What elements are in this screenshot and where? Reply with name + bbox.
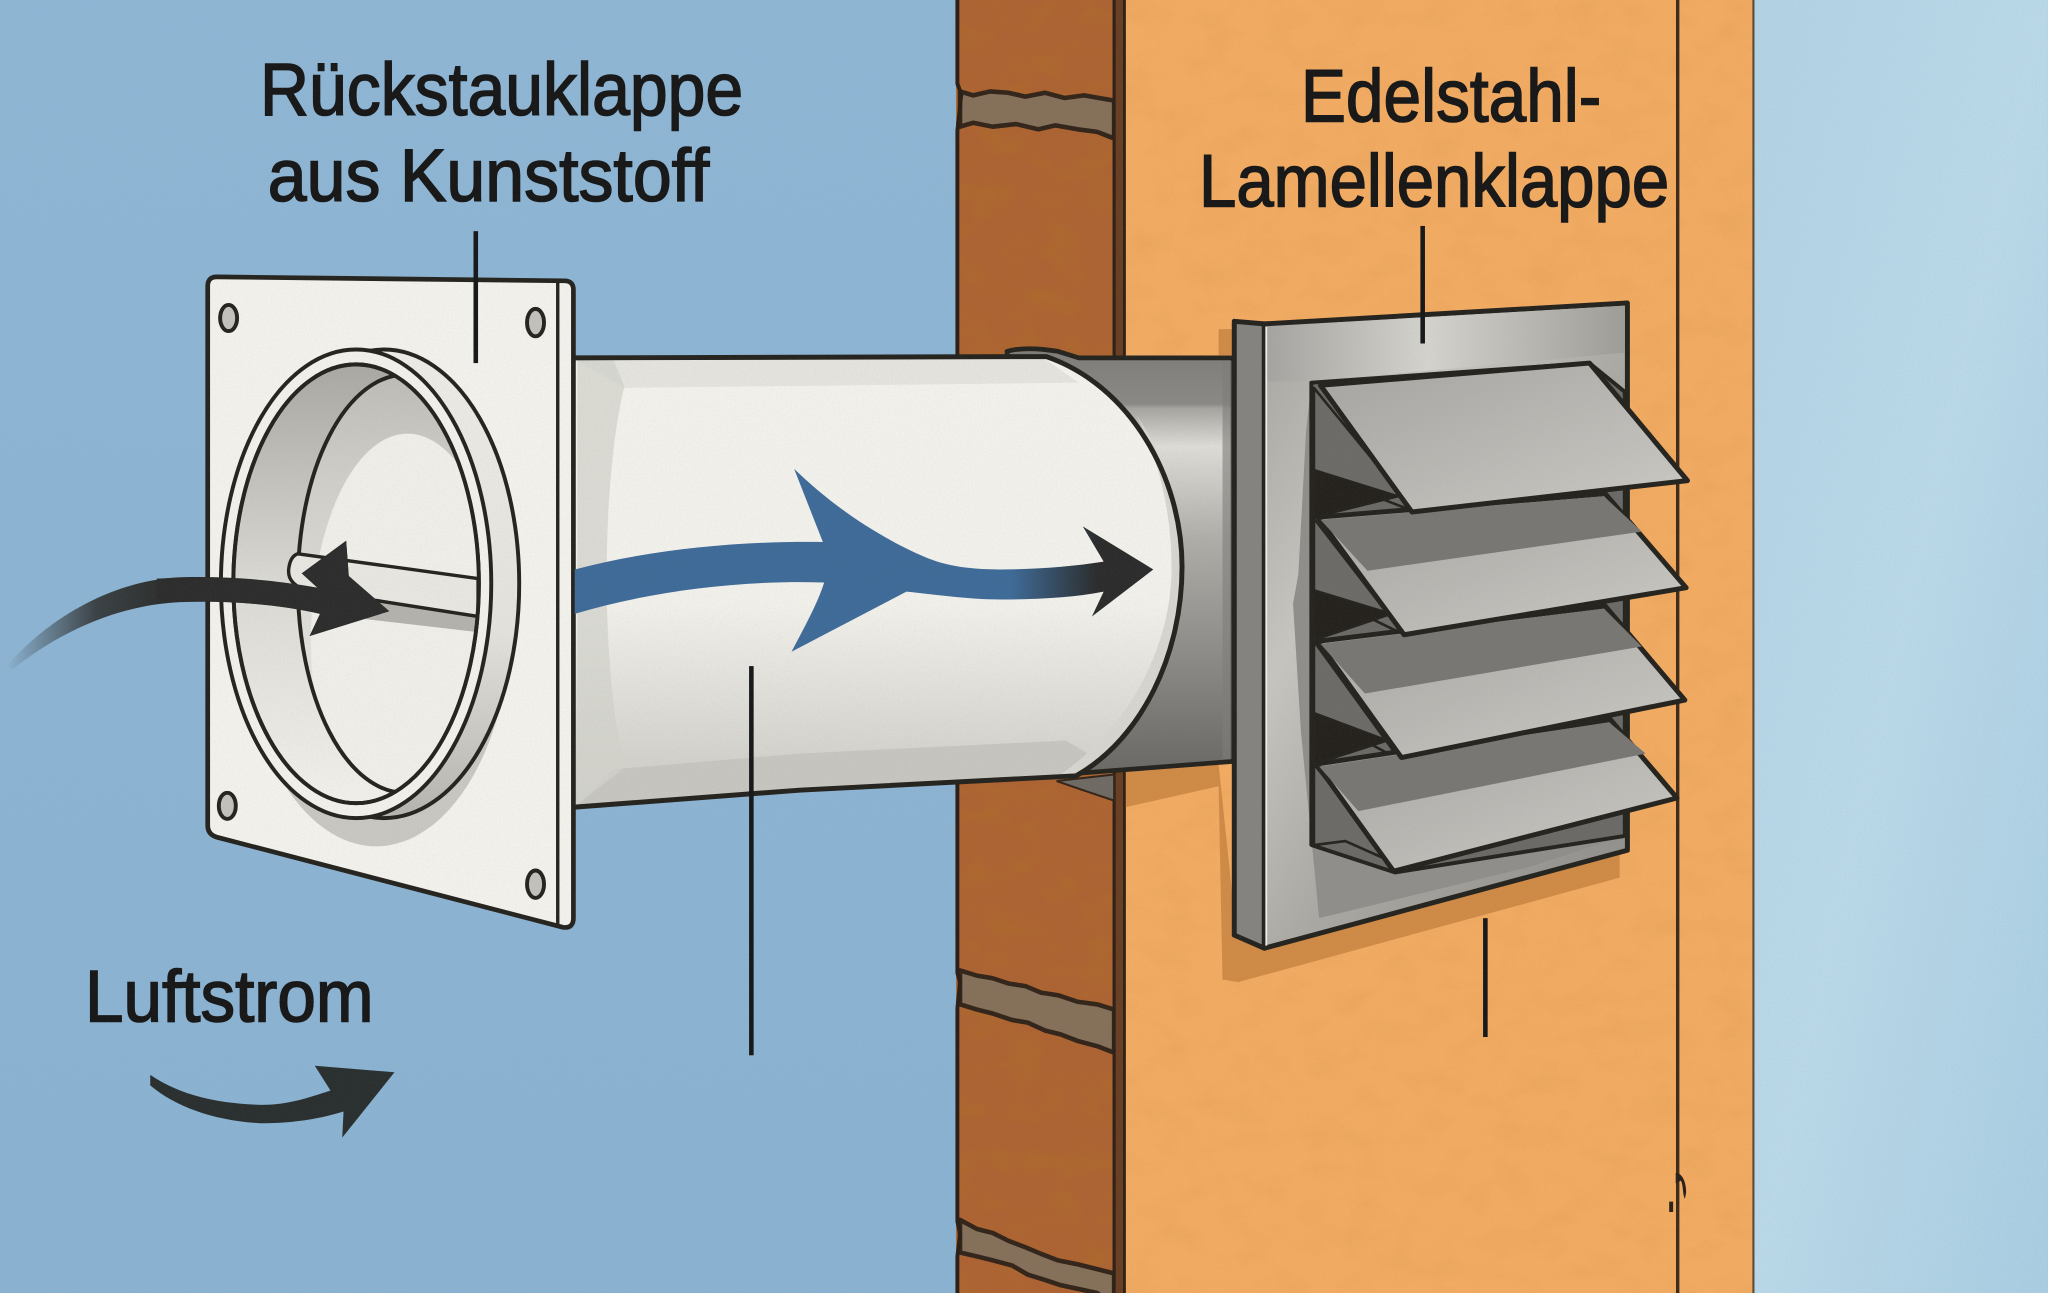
rod shadow: [365, 602, 476, 632]
louvre 4: [1317, 720, 1677, 871]
label: Luftstrom: Luftstrom: [85, 956, 374, 1037]
louvre side brackets: [1314, 388, 1416, 862]
label: Rückstauklappe aus Kunststoff: aus Kunststoff: [268, 134, 710, 217]
plate: [208, 277, 573, 927]
background: outside sky, right: [1753, 0, 2048, 1293]
hood front highlight: [1265, 327, 1267, 946]
leader line: flap: [473, 231, 478, 363]
hood shadow around opening: [1293, 383, 1625, 918]
shadow: cast by metal hood on wall: [1126, 329, 1620, 982]
hood face plate: [1264, 303, 1627, 948]
rod: [289, 554, 478, 616]
tube bottom band: [577, 741, 1095, 805]
panel: orange insulation layer: [1126, 0, 1753, 1293]
label: Edelstahl-Lamellenklappe: Lamellenklappe: [1199, 139, 1669, 222]
arrow: airflow through tube: [575, 469, 1153, 652]
ring interior: [233, 364, 479, 803]
tube end crescent: [1061, 415, 1179, 774]
ring inner outline: [233, 364, 479, 803]
tube outline: [575, 357, 1182, 807]
leader line: wall: [1483, 918, 1488, 1037]
tube top band: [577, 359, 1079, 388]
leader line: louvre hood: [1420, 226, 1425, 343]
opening: [1311, 363, 1625, 872]
label: Edelstahl-Lamellenklappe: [1199, 54, 1669, 222]
panel: metal tube section: [1007, 349, 1233, 801]
panel: stainless louvre hood: [1234, 303, 1687, 948]
ring rim depth: [249, 350, 519, 818]
louvre 3: [1318, 606, 1685, 758]
damper disc: [286, 375, 477, 792]
arrow: air entering flap: [7, 541, 389, 670]
ring shadow: [240, 376, 512, 846]
background: interior wall, left: [0, 0, 956, 1293]
ring front: [221, 350, 491, 818]
tube left shading: [577, 360, 624, 805]
louvre 1: [1320, 363, 1687, 512]
arrow: Luftstrom legend: [150, 1066, 394, 1138]
label: Rückstauklappe aus Kunststoff: [260, 48, 743, 217]
panel: plastic backdraft flap: [208, 277, 573, 927]
hood side face: [1234, 321, 1264, 948]
louvre 2: [1318, 494, 1686, 635]
plate edge: [556, 281, 559, 925]
mounting holes: [219, 305, 544, 898]
leader line: tube: [749, 666, 754, 1055]
hood top band highlight: [1267, 306, 1625, 381]
panel: white plastic tube: [575, 357, 1182, 807]
label: Edelstahl-Lamellenklappe: Edelstahl-: [1301, 54, 1601, 137]
label: Rückstauklappe aus Kunststoff: Rückstauklappe: [260, 48, 743, 131]
panel: brick wall section: [956, 0, 1126, 1293]
